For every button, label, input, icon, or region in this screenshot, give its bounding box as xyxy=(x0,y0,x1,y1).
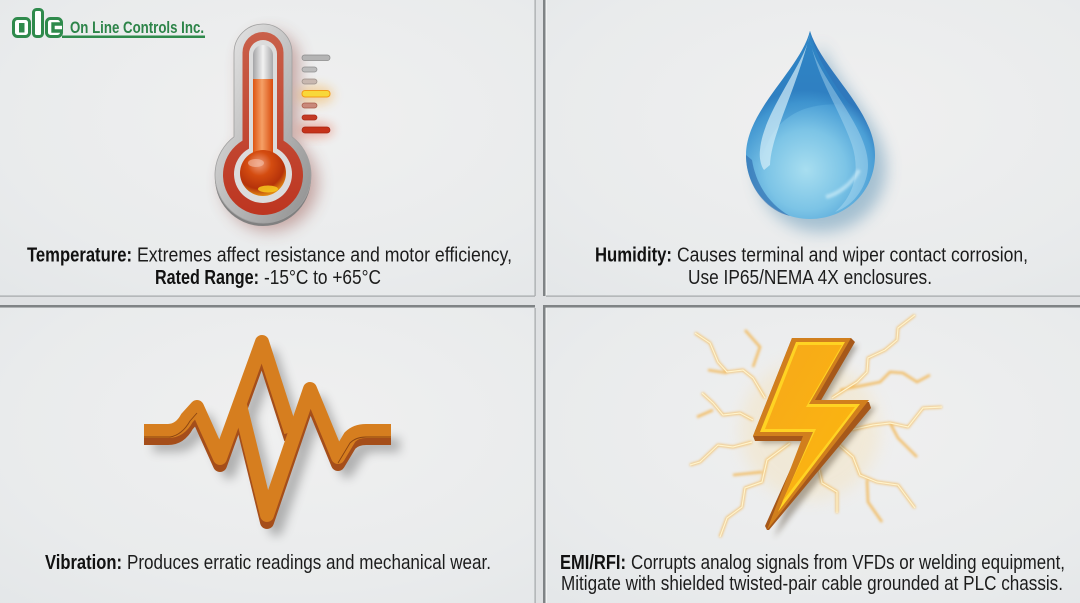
text: vibration description: Vibration: xyxy=(45,552,122,574)
text: humidity description: Causes terminal and wiper contact corrosion, xyxy=(677,244,1028,266)
panel: vibration xyxy=(0,308,535,603)
panel: temperature xyxy=(0,0,535,296)
panel: EMI/RFI xyxy=(546,308,1080,603)
icon: vibration waveform xyxy=(144,342,400,529)
text: humidity description xyxy=(595,244,1028,289)
icon: lightning bolt with sparks xyxy=(690,315,942,538)
text: vibration description: Produces erratic readings and mechanical wear. xyxy=(127,552,491,574)
text: EMI/RFI description: EMI/RFI: xyxy=(560,552,626,574)
icon: water drop xyxy=(746,31,886,232)
icon: thermometer xyxy=(215,24,318,231)
text: temperature description xyxy=(27,244,512,289)
text: temperature description: Rated Range: xyxy=(155,267,259,289)
logo: On Line Controls Inc.: On Line Controls Inc. xyxy=(70,19,204,37)
text: humidity description: Humidity: xyxy=(595,244,672,266)
text: temperature description: -15°C to +65°C xyxy=(264,267,381,289)
logo: On Line Controls Inc. xyxy=(14,10,205,38)
text: temperature description: Extremes affect resistance and motor efficiency, xyxy=(137,244,512,266)
text: EMI/RFI description xyxy=(560,552,1065,595)
icon: thermometer scale ticks xyxy=(298,55,334,138)
text: humidity description: Use IP65/NEMA 4X enclosures. xyxy=(688,267,932,289)
text: temperature description: Temperature: xyxy=(27,244,132,266)
panel: humidity xyxy=(546,0,1080,296)
